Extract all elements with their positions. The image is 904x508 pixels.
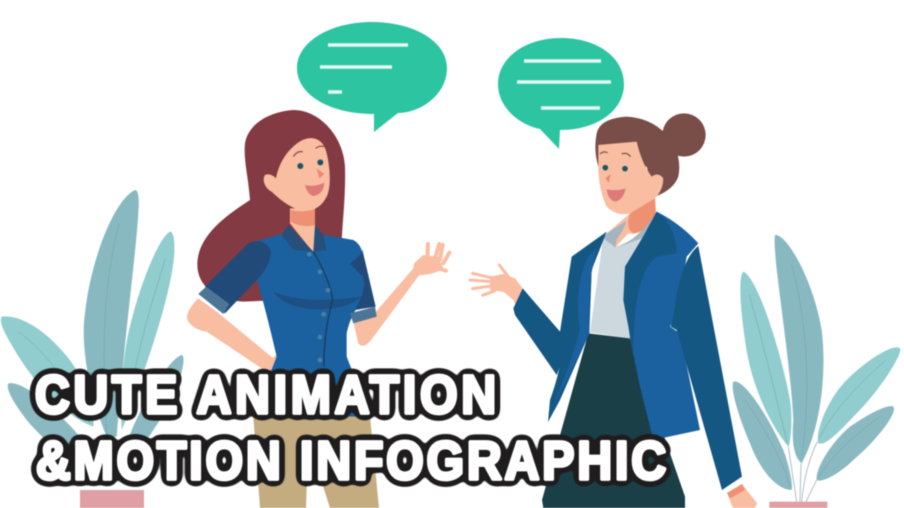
hair bun xyxy=(662,113,706,157)
leaf: left xyxy=(1,316,94,427)
leaf: right xyxy=(121,232,174,430)
nose xyxy=(317,168,324,178)
speech bubble: left xyxy=(297,22,447,132)
sleeve: right xyxy=(350,247,376,310)
buttons xyxy=(307,252,330,362)
shirt body xyxy=(248,233,370,417)
leaf: upper right xyxy=(818,347,900,444)
title xyxy=(35,364,666,491)
right plant xyxy=(733,235,900,508)
bubble text lines xyxy=(517,61,611,108)
forearm and palm xyxy=(353,255,443,346)
cuff: right xyxy=(350,307,377,323)
palm and wrist xyxy=(490,274,523,312)
leaf: lower left xyxy=(733,381,792,490)
pot: right plant xyxy=(769,502,827,508)
bubble text lines xyxy=(320,45,408,92)
leaf: lower right xyxy=(817,406,894,481)
face xyxy=(598,142,663,214)
shirt placket xyxy=(313,252,333,367)
cuff: left xyxy=(198,287,229,314)
neck xyxy=(607,197,656,247)
neck xyxy=(290,208,315,253)
leaf: left xyxy=(740,272,791,447)
pot: left plant xyxy=(80,490,144,508)
face xyxy=(264,138,330,211)
arm shape xyxy=(187,298,297,372)
eyebrows xyxy=(293,146,324,157)
hand fingers xyxy=(272,353,300,368)
jacket lapel shadow xyxy=(623,212,677,353)
woman left: long red hair, blue shirt xyxy=(187,110,449,508)
eyes xyxy=(602,165,608,170)
jacket right front xyxy=(625,212,700,440)
blouse collar xyxy=(603,215,659,248)
arm: left on hip xyxy=(187,298,300,372)
speech bubble: right xyxy=(498,38,624,149)
leaf: tall centre xyxy=(775,235,823,463)
fingers xyxy=(470,265,508,295)
woman right: hair bun, blue blazer xyxy=(470,113,757,508)
bubble shape xyxy=(297,22,447,132)
eyebrows xyxy=(600,152,631,157)
cuff shadow xyxy=(727,484,745,498)
fingers xyxy=(427,244,449,271)
leaf: left lower xyxy=(8,383,107,480)
hand xyxy=(470,265,523,312)
left plant xyxy=(1,190,184,508)
hair xyxy=(595,117,679,197)
sleeve: left xyxy=(205,241,271,313)
neck shadow xyxy=(291,208,315,226)
neck shadow xyxy=(628,198,656,233)
leaf: right lower xyxy=(127,355,184,450)
bubble shape xyxy=(498,38,624,149)
trousers xyxy=(253,417,379,508)
leaf veins xyxy=(18,223,166,433)
eyes xyxy=(297,163,303,169)
leaf: tall centre xyxy=(84,190,139,437)
jacket sleeve: extended arm xyxy=(513,288,573,375)
title line 1: CUTE ANIMATION xyxy=(35,364,496,425)
arm: right raised xyxy=(353,244,449,346)
mouth xyxy=(305,183,324,196)
hand: hanging arm xyxy=(727,484,757,508)
title line 2: &MOTION INFOGRAPHIC xyxy=(36,430,666,491)
mouth xyxy=(607,188,626,202)
nose xyxy=(605,174,611,183)
collar xyxy=(282,225,327,252)
leaf veins xyxy=(745,265,886,487)
jacket left lapel highlight xyxy=(550,248,597,413)
plant stems xyxy=(788,442,817,502)
jacket sleeve: hanging arm xyxy=(671,246,742,490)
skirt xyxy=(542,333,685,508)
blouse xyxy=(590,233,645,338)
jacket left front xyxy=(548,232,607,422)
hair xyxy=(197,110,345,302)
bust shadow xyxy=(273,292,362,309)
